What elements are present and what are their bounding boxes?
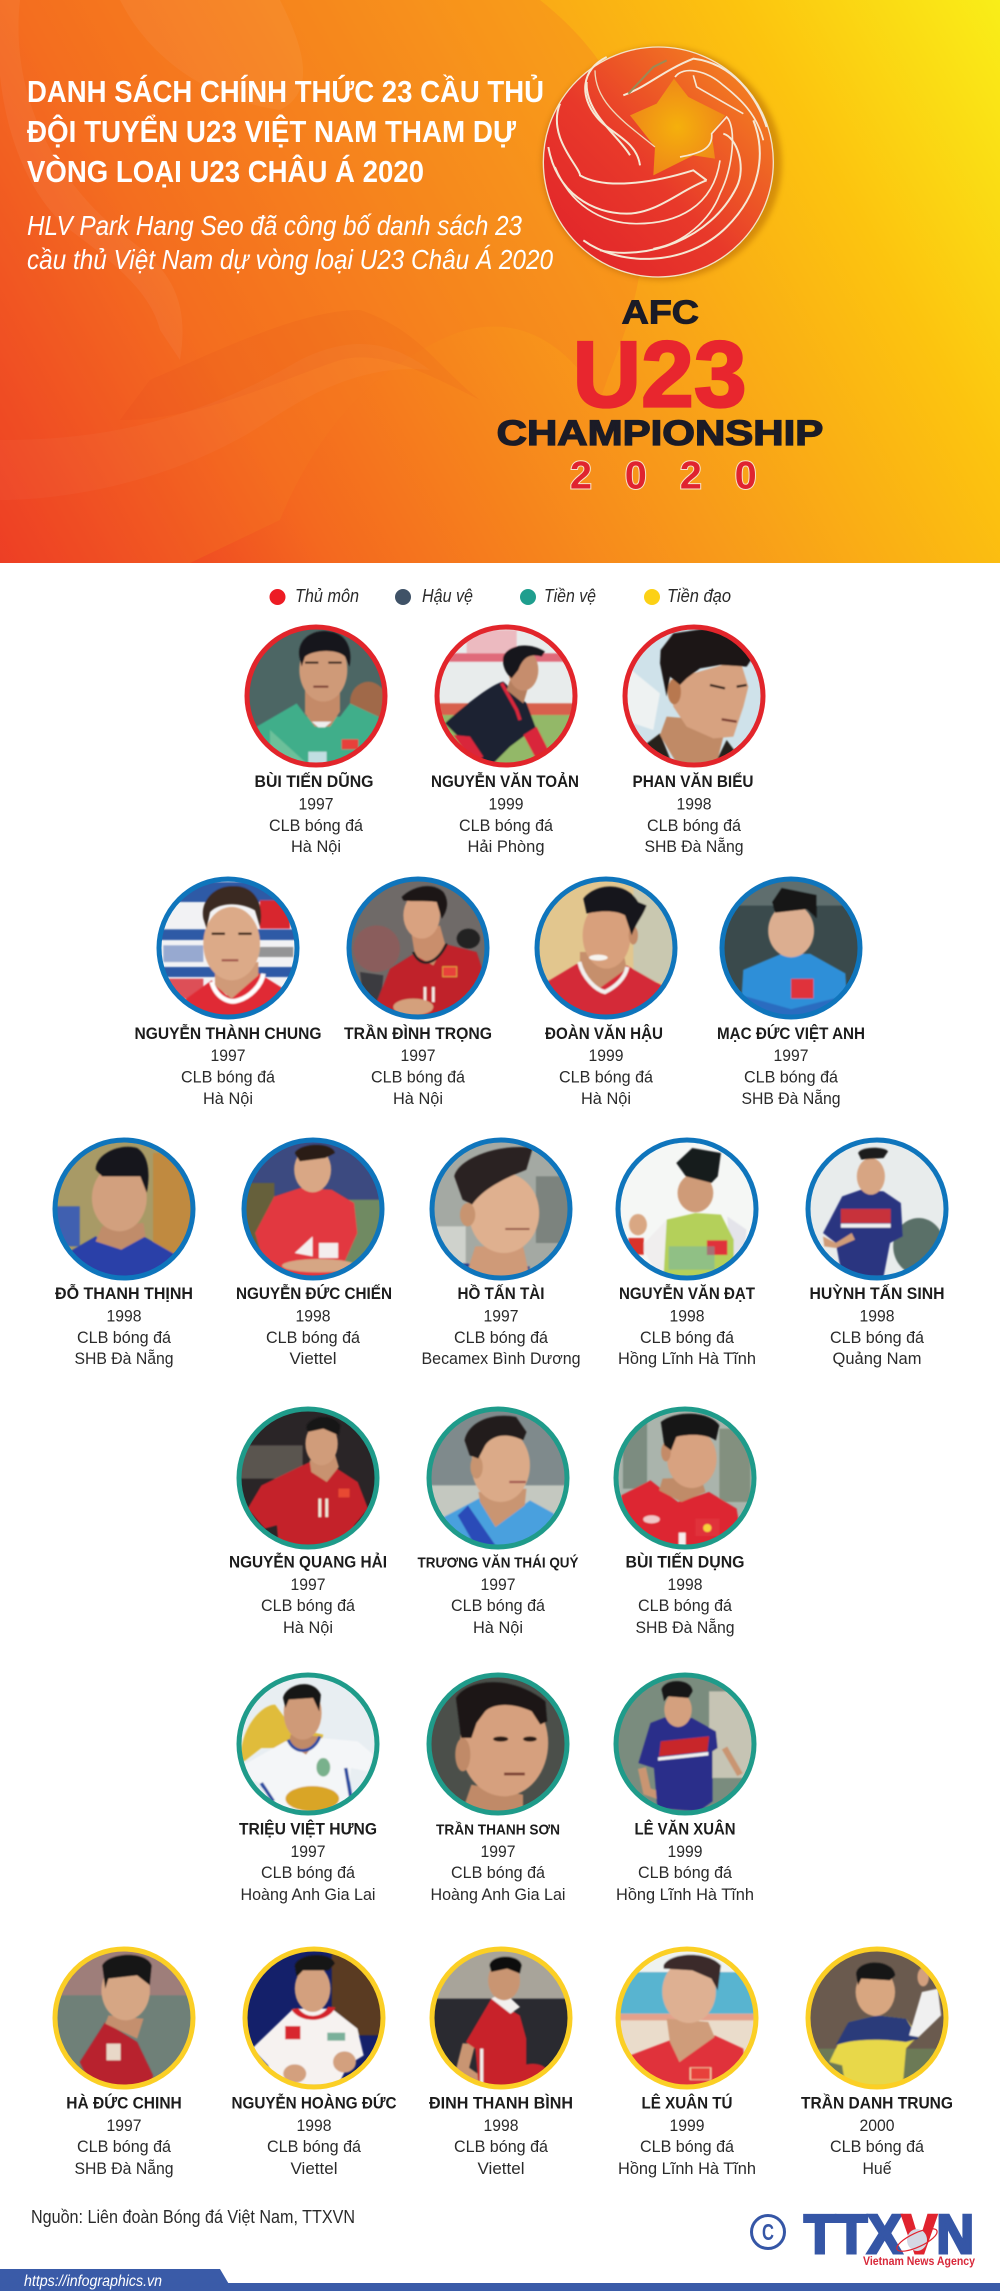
player: Huỳnh Tấn Sinh: 1998	[860, 1306, 894, 1326]
player: Triệu Việt Hưng: CLB bóng đá	[261, 1863, 356, 1882]
player: Trần Đình Trọng	[344, 878, 492, 1108]
player: Nguyễn Quang Hải: Hà Nội	[283, 1618, 333, 1637]
player: Trần Đình Trọng: TRẦN ĐÌNH TRỌNG	[344, 1024, 492, 1043]
player: Bùi Tiến Dũng: BÙI TIẾN DŨNG	[254, 771, 374, 791]
player: Hà Đức Chinh: SHB Đà Nẵng	[74, 2159, 174, 2178]
player: Mạc Đức Việt Anh: 1997	[774, 1046, 808, 1065]
player: Nguyễn Đức Chiến: Viettel	[290, 1349, 336, 1368]
player: Hà Đức Chinh	[51, 1948, 198, 2178]
player: Nguyễn Hoàng Đức	[232, 1948, 396, 2178]
player: Trần Thanh Sơn: 1997	[480, 1842, 516, 1861]
player: Bùi Tiến Dũng: Hà Nội	[291, 837, 341, 856]
player: Hồ Tấn Tài: CLB bóng đá	[454, 1328, 549, 1347]
player: Đinh Thanh Bình: ĐINH THANH BÌNH	[429, 2094, 573, 2112]
logo wordmark: AFC	[622, 294, 699, 331]
player: Nguyễn Hoàng Đức: NGUYỄN HOÀNG ĐỨC	[232, 2094, 396, 2112]
player: Trần Thanh Sơn: TRẦN THANH SƠN	[436, 1822, 560, 1838]
legend: Tiền đạo	[667, 586, 731, 606]
player: Nguyễn Văn Toản	[431, 626, 579, 856]
player: Nguyễn Văn Đạt: NGUYỄN VĂN ĐẠT	[619, 1284, 756, 1303]
logo wordmark: U23	[573, 323, 747, 427]
player: Huỳnh Tấn Sinh: CLB bóng đá	[830, 1328, 925, 1347]
header banner	[0, 0, 1000, 563]
icon: copyright	[752, 2216, 784, 2248]
player: Đoàn Văn Hậu: 1999	[588, 1046, 624, 1065]
title: DANH SÁCH CHÍNH THỨC 23 CẦU THỦ	[27, 73, 544, 109]
player: Đinh Thanh Bình	[427, 1948, 574, 2178]
player: Trần Thanh Sơn: Hoàng Anh Gia Lai	[430, 1885, 566, 1904]
player: Trần Thanh Sơn: CLB bóng đá	[451, 1863, 546, 1882]
player: Trần Đình Trọng: CLB bóng đá	[371, 1068, 466, 1086]
logo ball	[543, 47, 773, 277]
player: Phan Văn Biểu: SHB Đà Nẵng	[644, 837, 744, 856]
player: Nguyễn Thành Chung: NGUYỄN THÀNH CHUNG	[134, 1024, 322, 1043]
player: Nguyễn Văn Đạt: Hồng Lĩnh Hà Tĩnh	[618, 1349, 756, 1368]
player: Bùi Tiến Dũng: CLB bóng đá	[269, 816, 364, 835]
player: Lê Văn Xuân	[615, 1674, 755, 1904]
player: Lê Xuân Tú: CLB bóng đá	[640, 2137, 735, 2156]
title: VÒNG LOẠI U23 CHÂU Á 2020	[27, 153, 424, 189]
player: Bùi Tiến Dụng	[615, 1408, 755, 1637]
player: Đoàn Văn Hậu: ĐOÀN VĂN HẬU	[545, 1024, 663, 1043]
player: Lê Văn Xuân: Hồng Lĩnh Hà Tĩnh	[616, 1885, 754, 1904]
player: Phan Văn Biểu	[623, 626, 764, 856]
player: Trần Danh Trung: CLB bóng đá	[830, 2137, 925, 2156]
player: Lê Văn Xuân: CLB bóng đá	[638, 1863, 733, 1882]
player: Nguyễn Văn Đạt	[617, 1139, 757, 1368]
player: Bùi Tiến Dụng: SHB Đà Nẵng	[636, 1618, 734, 1637]
logo wordmark: CHAMPIONSHIP	[497, 414, 823, 453]
player: Mạc Đức Việt Anh: CLB bóng đá	[744, 1068, 839, 1086]
player: Trần Danh Trung: TRẦN DANH TRUNG	[801, 2094, 953, 2112]
logo wordmark	[497, 294, 823, 497]
player: Hồ Tấn Tài	[421, 1139, 580, 1368]
player: Đinh Thanh Bình: CLB bóng đá	[454, 2137, 549, 2156]
player: Nguyễn Thành Chung: CLB bóng đá	[181, 1068, 276, 1086]
player: Hà Đức Chinh: CLB bóng đá	[77, 2137, 172, 2156]
player: Trần Đình Trọng: Hà Nội	[393, 1089, 443, 1108]
player: Đỗ Thanh Thịnh: SHB Đà Nẵng	[74, 1349, 174, 1368]
player: Trần Danh Trung: Huế	[862, 2159, 892, 2178]
player: Nguyễn Văn Toản: NGUYỄN VĂN TOẢN	[431, 772, 579, 791]
player: Bùi Tiến Dụng: CLB bóng đá	[638, 1596, 733, 1615]
TTXVN logo: Vietnam News Agency	[863, 2254, 975, 2268]
player: Đinh Thanh Bình: Viettel	[478, 2159, 524, 2178]
player: Đỗ Thanh Thịnh: ĐỖ THANH THỊNH	[55, 1284, 193, 1303]
player: Nguyễn Văn Toản: CLB bóng đá	[459, 816, 554, 835]
player: Trần Danh Trung	[801, 1948, 953, 2178]
legend: Hậu vệ	[422, 586, 473, 606]
subtitle: cầu thủ Việt Nam dự vòng loại U23 Châu Á 2020	[27, 244, 553, 275]
title	[27, 73, 544, 189]
player: Trần Đình Trọng: 1997	[400, 1046, 436, 1065]
legend	[270, 586, 731, 606]
player: Nguyễn Hoàng Đức: CLB bóng đá	[267, 2137, 362, 2156]
player: Trương Văn Thái Quý: Hà Nội	[473, 1618, 523, 1637]
player: Huỳnh Tấn Sinh: Quảng Nam	[832, 1349, 922, 1368]
footer bar: https://infographics.vn	[24, 2273, 162, 2290]
player: Nguyễn Quang Hải: NGUYỄN QUANG HẢI	[229, 1552, 387, 1572]
player: Nguyễn Hoàng Đức: 1998	[296, 2116, 332, 2135]
player: Nguyễn Hoàng Đức: Viettel	[290, 2159, 338, 2178]
player: Nguyễn Thành Chung: Hà Nội	[203, 1089, 253, 1108]
player: Bùi Tiến Dũng	[246, 626, 387, 856]
player: Lê Văn Xuân: LÊ VĂN XUÂN	[634, 1820, 736, 1838]
player: Triệu Việt Hưng: 1997	[290, 1842, 326, 1861]
player: Nguyễn Văn Toản: Hải Phòng	[468, 837, 544, 856]
player: Nguyễn Đức Chiến: 1998	[296, 1306, 330, 1326]
player: Triệu Việt Hưng	[238, 1674, 378, 1904]
player: Nguyễn Quang Hải: CLB bóng đá	[261, 1596, 356, 1615]
source note: Nguồn: Liên đoàn Bóng đá Việt Nam, TTXVN	[31, 2207, 355, 2227]
player: Hà Đức Chinh: HÀ ĐỨC CHINH	[66, 2094, 182, 2112]
player: Nguyễn Văn Đạt: CLB bóng đá	[640, 1328, 735, 1347]
player: Mạc Đức Việt Anh	[715, 877, 868, 1108]
player: Nguyễn Văn Đạt: 1998	[670, 1306, 704, 1326]
player: Lê Xuân Tú	[612, 1948, 766, 2178]
player: Trương Văn Thái Quý	[418, 1408, 578, 1637]
TTXVN logo: TTXVN	[804, 2203, 974, 2265]
footer bar	[0, 2269, 1000, 2291]
player: Lê Văn Xuân: 1999	[668, 1842, 702, 1861]
player: Đỗ Thanh Thịnh	[54, 1139, 198, 1368]
player: Mạc Đức Việt Anh: MẠC ĐỨC VIỆT ANH	[717, 1024, 865, 1043]
player: Hà Đức Chinh: 1997	[106, 2116, 142, 2135]
icon: copyright: C	[762, 2219, 774, 2245]
player: Huỳnh Tấn Sinh	[807, 1139, 947, 1368]
player: Phan Văn Biểu: PHAN VĂN BIỂU	[632, 772, 754, 791]
player: Trương Văn Thái Quý: TRƯƠNG VĂN THÁI QUÝ	[418, 1554, 578, 1572]
player: Nguyễn Đức Chiến: NGUYỄN ĐỨC CHIẾN	[236, 1284, 392, 1303]
player: Triệu Việt Hưng: TRIỆU VIỆT HƯNG	[239, 1820, 377, 1838]
player: Nguyễn Văn Toản: 1999	[488, 794, 524, 814]
subtitle	[27, 210, 553, 275]
player: Lê Xuân Tú: Hồng Lĩnh Hà Tĩnh	[618, 2159, 756, 2178]
player: Trương Văn Thái Quý: CLB bóng đá	[451, 1596, 546, 1615]
player: Trần Danh Trung: 2000	[860, 2116, 894, 2135]
AFC U23 Championship 2020 logo	[497, 47, 823, 497]
player: Nguyễn Thành Chung: 1997	[210, 1046, 246, 1065]
player: Bùi Tiến Dụng: 1998	[668, 1575, 702, 1594]
player: Phan Văn Biểu: 1998	[676, 794, 712, 814]
player: Triệu Việt Hưng: Hoàng Anh Gia Lai	[240, 1885, 376, 1904]
player: Đỗ Thanh Thịnh: 1998	[106, 1306, 142, 1326]
player: Nguyễn Thành Chung	[134, 878, 322, 1108]
player: Huỳnh Tấn Sinh: HUỲNH TẤN SINH	[810, 1284, 944, 1303]
title: ĐỘI TUYỂN U23 VIỆT NAM THAM DỰ	[27, 113, 516, 149]
player: Đoàn Văn Hậu	[536, 878, 676, 1108]
player: Hồ Tấn Tài: HỒ TẤN TÀI	[458, 1284, 544, 1303]
legend: Tiền vệ	[544, 586, 596, 606]
player: Đoàn Văn Hậu: Hà Nội	[581, 1089, 631, 1108]
player: Trương Văn Thái Quý: 1997	[480, 1575, 516, 1594]
player: Hồ Tấn Tài: Becamex Bình Dương	[422, 1349, 580, 1368]
player: Phan Văn Biểu: CLB bóng đá	[647, 816, 742, 835]
legend: Thủ môn	[295, 586, 359, 606]
player: Nguyễn Đức Chiến	[236, 1139, 392, 1368]
player: Đoàn Văn Hậu: CLB bóng đá	[559, 1068, 654, 1086]
player: Trần Thanh Sơn	[428, 1674, 568, 1904]
player: Lê Xuân Tú: 1999	[670, 2116, 704, 2135]
player: Mạc Đức Việt Anh: SHB Đà Nẵng	[742, 1089, 840, 1108]
player: Bùi Tiến Dụng: BÙI TIẾN DỤNG	[626, 1552, 744, 1572]
player: Đinh Thanh Bình: 1998	[484, 2116, 518, 2135]
player: Đỗ Thanh Thịnh: CLB bóng đá	[77, 1328, 172, 1347]
player: Nguyễn Quang Hải	[229, 1408, 387, 1637]
player: Hồ Tấn Tài: 1997	[484, 1306, 518, 1326]
player: Lê Xuân Tú: LÊ XUÂN TÚ	[642, 2094, 732, 2112]
subtitle: HLV Park Hang Seo đã công bố danh sách 23	[27, 210, 522, 241]
player: Nguyễn Đức Chiến: CLB bóng đá	[266, 1328, 361, 1347]
player: Bùi Tiến Dũng: 1997	[298, 794, 334, 814]
logo wordmark: 2020	[570, 453, 757, 497]
player: Nguyễn Quang Hải: 1997	[290, 1575, 326, 1594]
